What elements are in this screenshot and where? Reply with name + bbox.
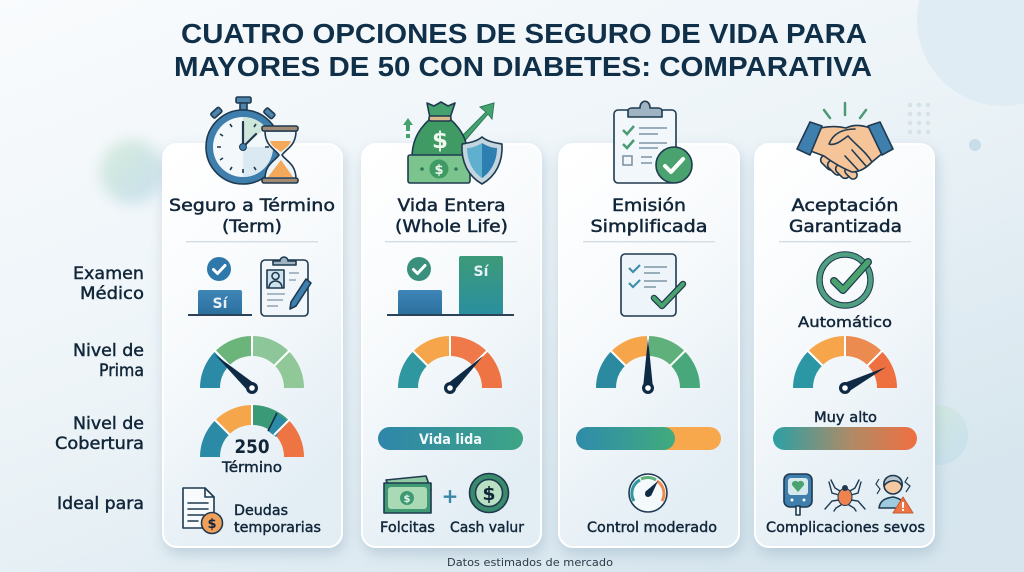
title: CUATRO OPCIONES DE SEGURO DE VIDA PARA — [181, 18, 867, 49]
heading: (Term) — [222, 217, 282, 237]
card background — [362, 144, 541, 547]
value: 250 termino: Término — [221, 460, 282, 476]
heading — [590, 196, 708, 237]
icon: stopwatch and hourglass — [206, 97, 298, 184]
pill: coverage bar — [773, 427, 917, 450]
icon: bills: $ — [404, 494, 411, 505]
icon: person with warning — [876, 476, 913, 513]
value: 250 termino — [221, 436, 282, 476]
card background — [559, 144, 739, 547]
icon: coin: $ — [482, 483, 496, 505]
divider — [583, 241, 715, 242]
icon: clipboard with check badge — [614, 101, 692, 183]
gauge: prima — [803, 335, 888, 394]
title — [174, 18, 872, 82]
heading: (Whole Life) — [395, 217, 508, 237]
bar chart: si: Sí — [474, 264, 490, 280]
gauge: cobertura — [210, 404, 294, 457]
icon: spider — [825, 480, 865, 511]
icon: money bag and shield — [403, 102, 502, 184]
gauge: prima — [210, 335, 294, 394]
label: examen medico — [73, 264, 144, 303]
icon: glucometer — [784, 474, 812, 515]
card background — [755, 144, 934, 547]
icon: plus: + — [442, 484, 458, 508]
panel: vida entera — [362, 102, 541, 547]
text: deudas temporarias — [234, 503, 321, 536]
label: nivel de prima: Nivel de — [73, 341, 144, 360]
heading: Aceptación — [792, 196, 898, 216]
text: complicaciones sevos: Complicaciones sevos — [766, 520, 925, 536]
value: 250 termino: 250 — [234, 436, 270, 458]
icon: large check ring — [820, 254, 870, 306]
text: automatico: Automático — [798, 315, 892, 331]
heading: Emisión — [612, 196, 686, 216]
bar: si — [188, 290, 252, 316]
title: MAYORES DE 50 CON DIABETES: COMPARATIVA — [174, 51, 872, 82]
label: nivel de prima — [73, 341, 144, 380]
label: nivel de prima: Prima — [99, 361, 144, 380]
text: muy alto: Muy alto — [814, 410, 877, 426]
divider — [779, 241, 911, 242]
label: examen medico: Examen — [73, 264, 144, 283]
icon: document with coin: $ — [207, 517, 217, 532]
heading — [169, 196, 335, 237]
bar chart: si — [387, 256, 514, 316]
icon: checklist — [621, 254, 683, 316]
icon: handshake — [797, 103, 893, 181]
heading: Vida Entera — [398, 196, 506, 216]
icon: control gauge — [629, 474, 667, 512]
divider — [186, 241, 318, 242]
heading: Simplificada — [590, 217, 708, 237]
heading: Garantizada — [789, 217, 902, 237]
text: cash valur: Cash valur — [450, 520, 524, 536]
panel: emision simplificada — [559, 101, 739, 547]
icon: money bag and shield: $ — [432, 128, 448, 154]
icon: bills — [384, 476, 431, 513]
panel: seguro a termino — [163, 97, 342, 547]
gauge: prima — [408, 335, 492, 394]
label: nivel de cobertura: Cobertura — [55, 434, 144, 453]
pill: coverage bar — [576, 427, 721, 450]
heading: Seguro a Término — [169, 196, 335, 216]
pill: vida lida — [378, 427, 523, 450]
icon: check — [207, 257, 231, 281]
text: folcitas: Folcitas — [380, 520, 435, 536]
divider — [385, 241, 517, 242]
heading — [395, 196, 508, 237]
text: control moderado: Control moderado — [587, 520, 717, 536]
text: deudas temporarias: Deudas — [234, 503, 288, 519]
card background — [163, 144, 342, 547]
label: examen medico: Médico — [80, 284, 144, 303]
bar: si: Sí — [213, 296, 229, 312]
row labels — [55, 264, 144, 513]
label: ideal para: Ideal para — [57, 494, 144, 513]
footnote: Datos estimados de mercado — [447, 556, 613, 569]
heading — [789, 196, 902, 237]
icon: clipboard with pen — [261, 257, 311, 316]
panel: aceptacion garantizada — [755, 103, 934, 547]
gauge: prima — [606, 335, 690, 394]
text: deudas temporarias: temporarias — [234, 520, 321, 536]
pill: vida lida: Vida lida — [419, 432, 482, 448]
label: nivel de cobertura: Nivel de — [73, 414, 144, 433]
label: nivel de cobertura — [55, 414, 144, 453]
icon: money bag and shield: $ — [434, 163, 444, 178]
icon: check — [407, 257, 431, 281]
icon: coin — [470, 474, 508, 512]
icon: document with coin — [183, 488, 222, 534]
